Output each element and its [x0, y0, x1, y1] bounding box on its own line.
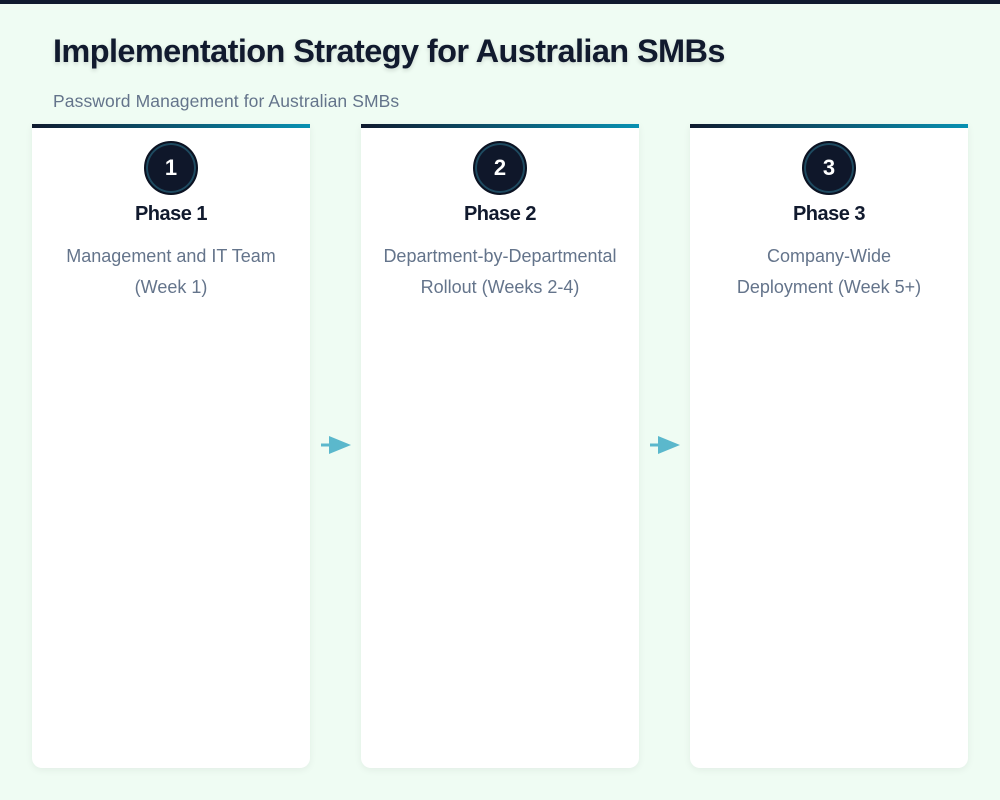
text: phase 3 description: Company-Wide — [767, 246, 891, 266]
title: Implementation Strategy for Australian SMBs — [53, 33, 725, 69]
text: phase 3 description — [737, 246, 921, 297]
text: phase 1 description — [66, 246, 276, 297]
heading: phase 3: Phase 3 — [793, 203, 865, 225]
icon: number 1: 1 — [165, 155, 177, 180]
heading: phase 2: Phase 2 — [464, 203, 536, 225]
text: phase 1 description: Management and IT Team — [66, 246, 276, 266]
text: phase 2 description: Rollout (Weeks 2-4) — [421, 277, 579, 297]
icon: number 2 — [473, 141, 527, 195]
text: phase 2 description — [383, 246, 617, 297]
text: phase 3 description: Deployment (Week 5+) — [737, 277, 921, 297]
icon: number 3: 3 — [823, 155, 835, 180]
heading: phase 1: Phase 1 — [135, 203, 207, 225]
panel: phase 2 — [361, 124, 639, 768]
panel: phase 3 — [690, 124, 968, 768]
arrow: phase 1 to 2 — [321, 436, 351, 454]
icon: number 3 — [802, 141, 856, 195]
subtitle: Password Management for Australian SMBs — [53, 91, 399, 111]
text: phase 2 description: Department-by-Departmental — [383, 246, 617, 266]
icon: number 1 — [144, 141, 198, 195]
panel: phase 1 — [32, 124, 310, 768]
arrow: phase 2 to 3 — [650, 436, 680, 454]
text: phase 1 description: (Week 1) — [135, 277, 207, 297]
icon: number 2: 2 — [494, 155, 506, 180]
